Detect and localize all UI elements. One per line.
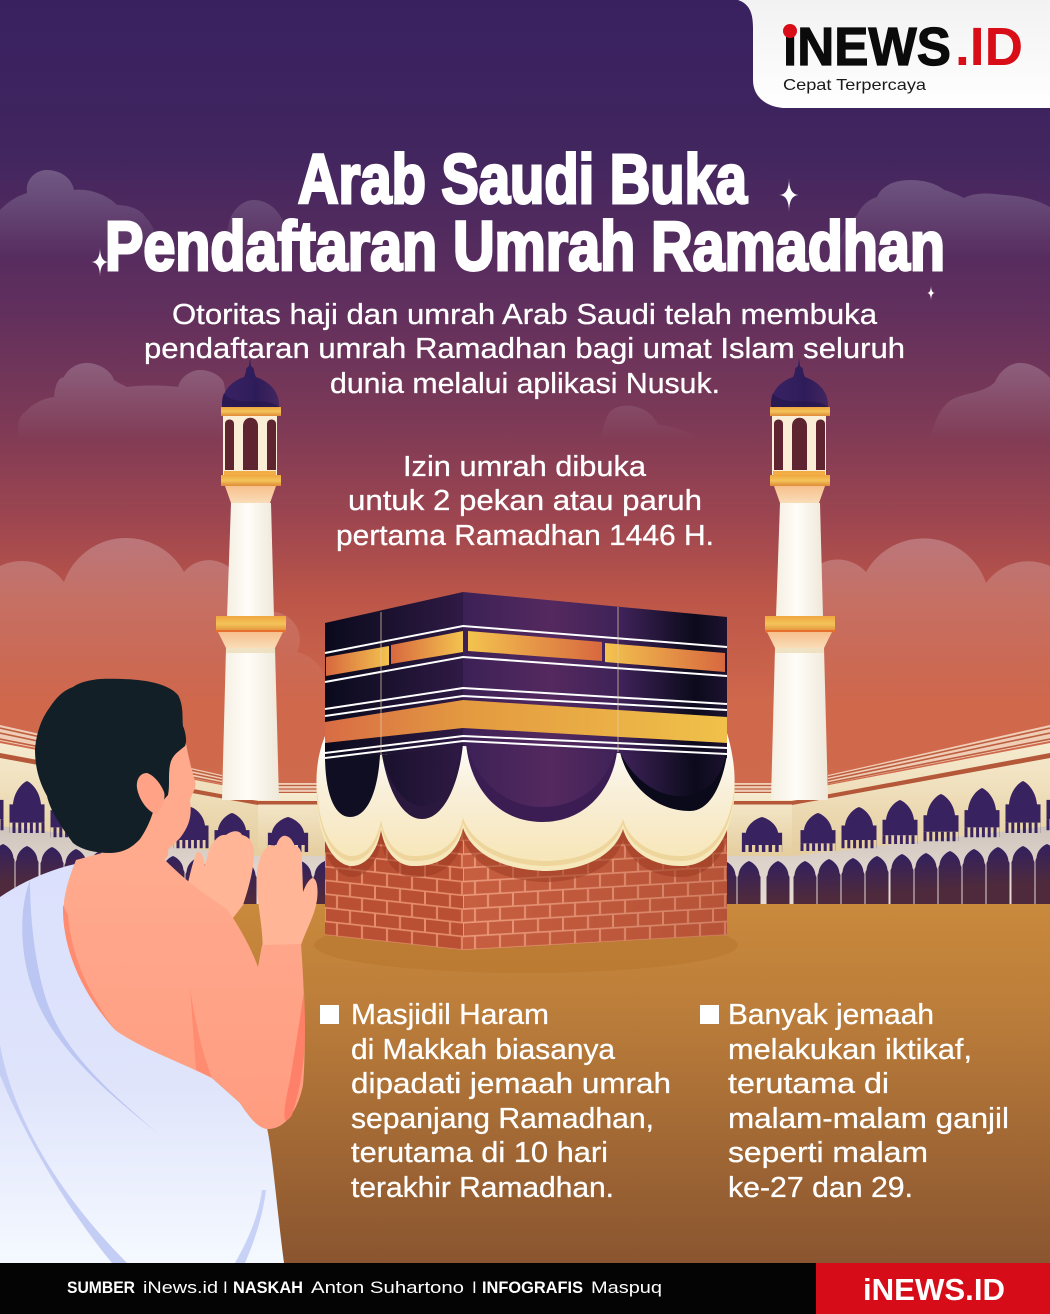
permit text (336, 451, 714, 552)
footer bar (0, 1263, 1050, 1314)
pilgrim far hand (185, 831, 254, 918)
pilgrim hair (35, 679, 186, 853)
bullet: iktikaf: Banyak jemaah (728, 999, 934, 1031)
footer credits (67, 1278, 662, 1297)
permit text: Izin umrah dibuka (403, 451, 647, 483)
footer logo block (816, 1263, 1050, 1314)
bullet: iktikaf: terutama di (728, 1068, 889, 1100)
permit text: pertama Ramadhan 1446 H. (336, 520, 714, 552)
logo tagline: Cepat Terpercaya (783, 77, 926, 94)
logo panel (738, 0, 1050, 108)
colonnade: left side (0, 725, 525, 931)
footer credits: Maspuq (591, 1278, 662, 1297)
footer credits: NASKAH (233, 1278, 303, 1297)
intro text (144, 299, 905, 400)
intro text: Otoritas haji dan umrah Arab Saudi telah membuka (172, 299, 878, 331)
ground (0, 904, 1050, 1263)
kaaba gold belt (325, 700, 727, 743)
intro text: dunia melalui aplikasi Nusuk. (330, 368, 720, 400)
intro text: pendaftaran umrah Ramadhan bagi umat Islam seluruh (144, 333, 905, 365)
bullet: Masjidil Haram: sepanjang Ramadhan, (351, 1103, 654, 1135)
kaaba base (314, 917, 738, 973)
pilgrim back and arm (64, 840, 305, 1129)
kaaba brick walls (325, 828, 727, 950)
bullet: Masjidil Haram: dipadati jemaah umrah (351, 1068, 671, 1100)
logo wordmark: .ID (955, 17, 1023, 77)
pilgrim face and neck (100, 710, 195, 862)
logo wordmark: iNEWS (783, 17, 951, 77)
kaaba cream valance (316, 723, 735, 871)
bullet: iktikaf: melakukan iktikaf, (728, 1034, 972, 1066)
bullet: Masjidil Haram: di Makkah biasanya (351, 1034, 616, 1066)
clouds: middle (18, 363, 1050, 440)
pilgrim arm shading (63, 905, 305, 1120)
pilgrim ihram cloth (0, 864, 284, 1263)
kaaba seams (381, 607, 618, 760)
bullet: Masjidil Haram: Masjidil Haram (351, 999, 549, 1031)
kaaba white stripes (325, 626, 727, 758)
title: Arab Saudi Buka (298, 140, 748, 218)
bullet: iktikaf: seperti malam (728, 1137, 928, 1169)
bullet: Masjidil Haram: terakhir Ramadhan. (351, 1172, 614, 1204)
permit text: untuk 2 pekan atau paruh (348, 485, 702, 517)
minaret: right (765, 358, 835, 800)
bullet: iktikaf: malam-malam ganjil (728, 1103, 1009, 1135)
pilgrim (0, 679, 318, 1263)
footer logo block: iNEWS.ID (863, 1272, 1005, 1307)
kaaba black kiswah cloth (325, 592, 727, 822)
footer credits: I (223, 1278, 228, 1297)
minaret: left (216, 358, 286, 800)
footer credits: I (472, 1278, 477, 1297)
clouds: large lower (0, 538, 1050, 720)
bullet: iktikaf (700, 999, 1009, 1204)
bullet: Masjidil Haram: terutama di 10 hari (351, 1137, 608, 1169)
footer credits: SUMBER (67, 1278, 135, 1297)
bullet: Masjidil Haram (320, 999, 671, 1204)
kaaba (316, 592, 735, 950)
pilgrim near hand (257, 836, 318, 965)
bullet: iktikaf: ke-27 dan 29. (728, 1172, 913, 1204)
footer credits: iNews.id (143, 1278, 218, 1297)
footer credits: Anton Suhartono (311, 1278, 464, 1297)
kaaba gold panels (326, 631, 725, 676)
sparkles (91, 178, 935, 301)
footer credits: INFOGRAFIS (482, 1278, 583, 1297)
clouds: upper (0, 170, 1050, 258)
colonnade: right side (525, 725, 1050, 931)
title (105, 140, 945, 285)
pilgrim ear (137, 773, 165, 814)
